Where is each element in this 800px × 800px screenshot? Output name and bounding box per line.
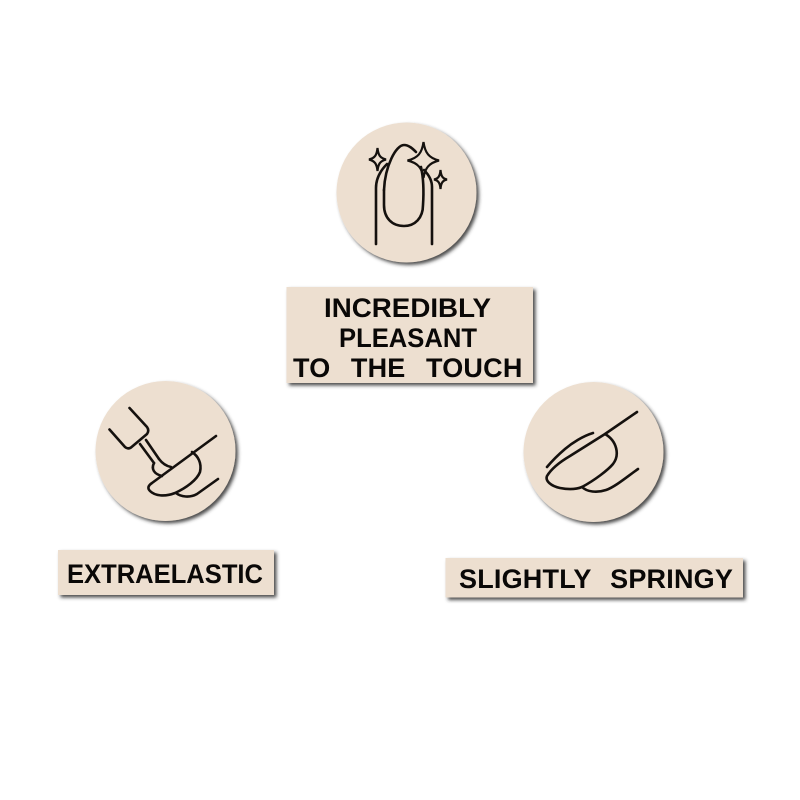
label: incredibly pleasant to the touch: INCREDIBLY: [324, 293, 491, 323]
icon: flexing nail: [524, 382, 664, 522]
label: incredibly pleasant to the touch: PLEASANT: [339, 323, 477, 353]
panel: slightly springy: [446, 382, 743, 598]
label: slightly springy: [446, 558, 743, 598]
label: incredibly pleasant to the touch: TO THE TOUCH: [293, 353, 523, 383]
label: slightly springy: SLIGHTLY SPRINGY: [459, 564, 733, 594]
icon: nail with sparkles: [336, 122, 476, 262]
label: extraelastic: [58, 550, 274, 595]
panel: incredibly pleasant to the touch: [286, 122, 533, 383]
icon: brush applying gel to nail: [96, 381, 236, 521]
label: incredibly pleasant to the touch: [286, 287, 533, 383]
label: extraelastic: EXTRAELASTIC: [67, 559, 263, 589]
panel: extraelastic: [58, 381, 274, 595]
